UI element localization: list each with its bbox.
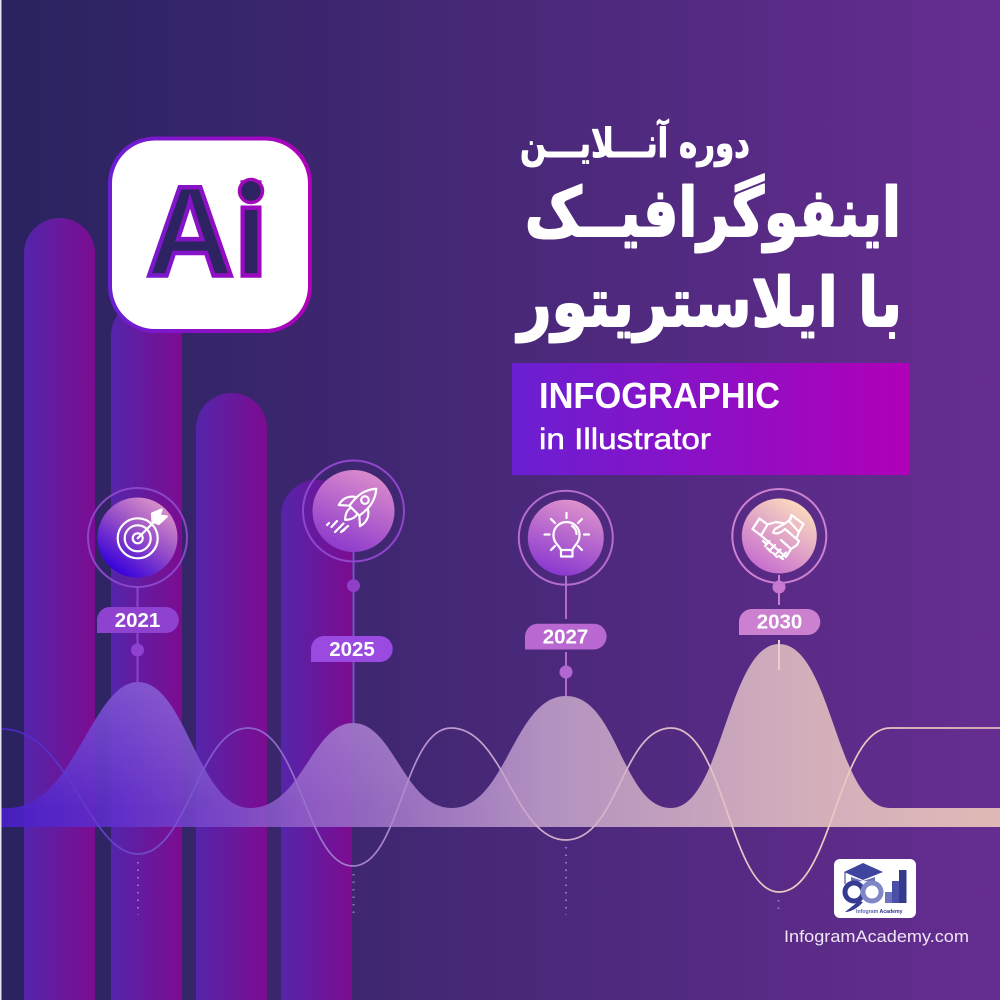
title line 2: اینفوگرافیــک [525, 174, 901, 253]
title line 3: با ایلاستریتور [515, 264, 902, 343]
milestone 2027 [519, 491, 613, 696]
logo: Infogram Academy: Infogram Academy [856, 909, 903, 915]
subtitle banner [512, 363, 910, 475]
logo: Infogram Academy [834, 859, 916, 918]
label 2030: 2030 [757, 610, 802, 634]
area wave chart [0, 644, 1000, 827]
label 2025: 2025 [329, 638, 375, 661]
subtitle banner: in Illustrator [539, 423, 711, 456]
label 2021 [97, 607, 179, 633]
label 2025 [311, 636, 393, 662]
subtitle banner: INFOGRAPHIC [539, 375, 780, 416]
label 2021: 2021 [115, 609, 160, 632]
icon: handshake [752, 515, 804, 559]
title line 1: دوره آنـــلایـــن [520, 118, 750, 167]
milestone 2030 [732, 489, 826, 670]
edge strip [0, 0, 2, 1000]
Ai app icon [110, 138, 310, 331]
icon: light bulb [544, 513, 589, 556]
icon: rocket [327, 478, 387, 532]
milestone 2021 [88, 488, 187, 682]
label 2027: 2027 [543, 626, 588, 648]
line wave [0, 728, 1000, 892]
Ai letters: Ai [146, 160, 268, 304]
milestone 2025 [303, 460, 404, 723]
label 2027 [525, 624, 607, 650]
icon: target [118, 510, 167, 558]
label 2030 [739, 609, 820, 635]
dotted drop lines [138, 847, 778, 915]
website: InfogramAcademy.com [784, 928, 969, 946]
vertical bars [24, 218, 352, 1000]
